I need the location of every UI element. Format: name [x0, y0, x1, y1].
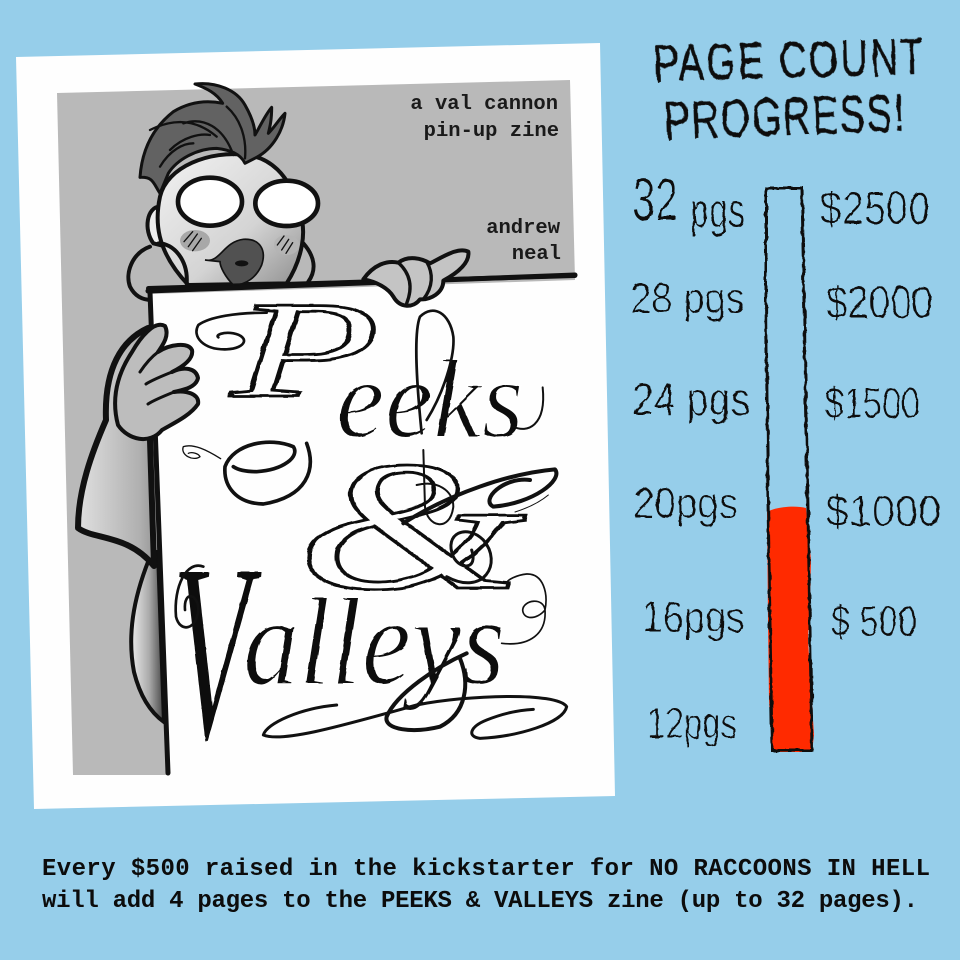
label: 16 pgs: 16pgs [642, 593, 745, 642]
text: andrew neal: andrew [486, 217, 561, 240]
glasses [178, 178, 242, 226]
text: a val cannon pin-up zine: pin-up zine [424, 120, 559, 143]
trailing curl after s [513, 387, 543, 429]
chart: thermometer progress bar [766, 188, 814, 752]
eeks: eeks [336, 338, 524, 462]
footer line two: will add 4 pages to the PEEKS & VALLEYS zine (up to 32 pages). [42, 888, 918, 915]
nose and mouth [205, 239, 263, 285]
label: 32 pgs: pgs [690, 185, 745, 238]
long bottom flourish [263, 696, 567, 738]
hair strands [150, 107, 245, 167]
small left curl [183, 446, 221, 459]
dollar amount labels [820, 182, 941, 646]
hair [140, 84, 285, 193]
label: 2500 dollars: $2500 [820, 182, 930, 234]
V left curl [176, 566, 203, 627]
text: a val cannon pin-up zine: a val cannon [410, 93, 558, 116]
white paper print [16, 43, 615, 809]
page count labels [630, 166, 750, 748]
footer note [42, 856, 930, 915]
face [158, 154, 303, 285]
illustration: character head [128, 84, 575, 300]
shoulders [128, 243, 314, 300]
arm [78, 325, 190, 566]
label: 2000 dollars: $2000 [826, 276, 933, 328]
icon: hand gripping sign top [363, 250, 468, 306]
sign top edge [148, 276, 575, 288]
label: 1000 dollars: $1000 [826, 487, 941, 536]
heading line two: PROGRESS! [663, 82, 905, 151]
hip [131, 552, 164, 722]
panel: white sign [152, 280, 577, 776]
sign left edge line [150, 292, 168, 773]
swashes on the title [183, 311, 543, 504]
lettering: Valleys [172, 510, 505, 794]
alleys: alleys [243, 574, 505, 712]
sign top edge line [148, 275, 575, 291]
lettering: Peeks [230, 273, 524, 462]
heading: page count progress [653, 27, 924, 151]
lettering: ampersand: & [296, 424, 526, 628]
thermometer outline [766, 188, 812, 750]
label: 20 pgs: 20pgs [633, 479, 738, 528]
large V: V [172, 510, 262, 794]
cheeks [180, 230, 210, 251]
label: 12 pgs: 12pgs [647, 699, 737, 748]
text: andrew neal: neal [512, 243, 561, 266]
lower loop swirl [225, 442, 310, 504]
ascender loop [416, 311, 453, 433]
footer line one: Every $500 raised in the kickstarter for NO RACCOONS IN HELL [42, 856, 930, 883]
tail after s [502, 574, 546, 644]
panel: zine cover photo [16, 43, 615, 809]
label: 32 pgs [632, 166, 745, 238]
large P: P [230, 273, 380, 426]
y descender loop [386, 653, 467, 730]
label: 28 pgs: 28 pgs [630, 274, 745, 323]
label: 500 dollars: $ 500 [831, 597, 917, 646]
icon: hand gripping sign side [115, 325, 198, 439]
swashes under Valleys [176, 566, 567, 738]
swash on the ampersand [403, 450, 556, 583]
illustration: character arm and hip [78, 325, 190, 722]
label: 32 pgs: 32 [632, 166, 678, 233]
ear [148, 207, 167, 247]
top-left swirl [196, 313, 267, 349]
label: 1500 dollars: $1500 [825, 379, 920, 428]
grey cover background [57, 80, 575, 775]
heading line one: PAGE COUNT [653, 27, 924, 92]
label: 24 pgs: 24 pgs [632, 373, 750, 425]
hand on cheek [159, 243, 187, 283]
red fill at 1000 dollars [767, 507, 814, 752]
